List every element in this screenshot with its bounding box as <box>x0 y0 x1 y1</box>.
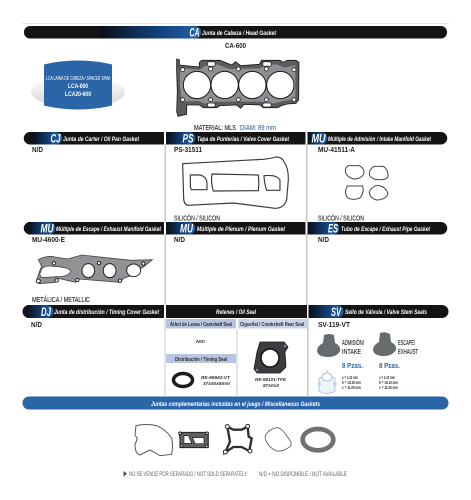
icon: exhaust seal <box>373 332 396 356</box>
header: timing cover gasket: Junta de distribución / Timing Cover Gasket <box>54 310 160 316</box>
header: exhaust manifold gasket <box>24 222 164 236</box>
part status: N/D <box>318 235 329 244</box>
part number: CA-600: CA-600 <box>225 41 246 50</box>
dimensions: exhaust: b = 18.16 mm <box>379 380 398 385</box>
header: exhaust manifold gasket: MU <box>40 222 54 236</box>
header: plenum gasket <box>166 222 306 236</box>
footnotes <box>124 471 347 478</box>
header: intake manifold gasket: Múltiple de Admisión / Intake Manifold Gasket <box>328 137 432 143</box>
part number: MU-41511-A <box>318 145 355 154</box>
timing seal part text <box>201 375 231 386</box>
crankshaft seal part text <box>255 377 287 388</box>
header: valve stem seals: SV <box>331 305 342 319</box>
callout: spacer shim: LCA LAINA DE CABEZA / SPACER SHIM <box>46 76 110 82</box>
label: intake <box>342 338 365 356</box>
subheader: camshaft seal <box>166 319 236 328</box>
panel: valve cover gasket <box>166 132 306 222</box>
spec: material and diameter: DIAM: 89 mm <box>240 123 276 132</box>
header: valve cover gasket: Tapa de Punterías / Valve Cover Gasket <box>197 137 290 143</box>
header: oil seal <box>166 305 307 318</box>
panel: oil pan gasket <box>24 132 164 154</box>
header: intake manifold gasket: MU <box>312 132 326 146</box>
note: not available: N/D = NO DISPONIBLE / NOT AVAILABLE <box>259 472 347 478</box>
subheader: crankshaft seal <box>238 319 307 328</box>
icon: crankshaft seal <box>254 342 288 373</box>
part number: SV-119-VT <box>318 320 350 329</box>
note: not sold separately: NO SE VENDE POR SEPARADO / NOT SOLD SEPARATELY <box>129 472 247 478</box>
subheader: camshaft seal: Árbol de Levas / Camshaft Seal <box>170 321 232 328</box>
dimensions: exhaust <box>379 375 398 390</box>
panel: plenum gasket <box>166 222 306 244</box>
header: valve cover gasket: PS <box>182 132 194 146</box>
label: intake: INTAKE <box>342 347 361 356</box>
callout: spacer shim <box>31 60 125 110</box>
callout: spacer shim: LCA-600 <box>68 83 88 90</box>
dimensions: exhaust: c = 11.05 mm <box>379 385 398 390</box>
icon: intake seal <box>317 334 340 357</box>
header: miscellaneous gaskets: Juntas complementarias incluidas en el juego / Miscellaneous Gaskets <box>151 402 321 408</box>
part number: MU-4600-E <box>32 235 65 244</box>
panel: exhaust manifold gasket <box>24 222 164 304</box>
header: exhaust pipe gasket <box>308 222 447 236</box>
header: exhaust pipe gasket: Tubo de Escape / Exhaust Pipe Gasket <box>341 227 431 233</box>
timing seal part text: RE-99662-VT <box>201 375 231 380</box>
panel: oil seals <box>166 305 307 388</box>
header: head gasket: Junta de Cabeza / Head Gasket <box>202 31 277 37</box>
dimensions: intake <box>342 375 361 390</box>
header: oil pan gasket: CJ <box>50 132 61 146</box>
header: valve stem seals <box>308 305 448 319</box>
crankshaft seal part text: RE-99101-TFE <box>255 377 287 382</box>
panel: valve stem seals <box>308 305 448 394</box>
panel: miscellaneous gaskets <box>22 396 448 456</box>
icon: timing seal ring <box>174 374 192 386</box>
header: miscellaneous gaskets <box>22 396 448 410</box>
quantity: exhaust: 8 Pzas. <box>379 361 400 370</box>
icon: intake manifold gaskets <box>345 166 388 200</box>
header: valve cover gasket <box>166 132 306 146</box>
header: valve stem seals: Sello de Válvula / Valve Stem Seals <box>345 310 428 316</box>
quantity: intake: 8 Pzas. <box>342 361 363 370</box>
crankshaft seal part text: 87x0x0 <box>263 383 279 388</box>
icon: head gasket <box>177 59 299 116</box>
header: timing cover gasket <box>23 305 164 319</box>
icon: valve cover gasket <box>183 157 288 208</box>
label: exhaust <box>398 338 418 356</box>
dimensions: intake: b = 18.16 mm <box>342 380 361 385</box>
icon: arrow marker <box>124 471 127 477</box>
header: head gasket: CA <box>190 26 200 40</box>
timing seal part text: 37x50x8mm <box>203 381 230 386</box>
label: intake: ADMISIÓN/ <box>342 338 365 347</box>
spec: material and diameter <box>194 123 276 132</box>
label: exhaust: ESCAPE/ <box>398 338 415 347</box>
header: exhaust manifold gasket: Múltiple de Escape / Exhaust Manifold Gasket <box>56 227 162 233</box>
material label: METÁLICA / METALLIC <box>32 295 90 304</box>
header: oil seal: Retenes / Oil Seal <box>216 310 256 316</box>
spec: material and diameter: MATERIAL: MLS <box>194 123 236 132</box>
dimensions: intake: a = 4.32 mm <box>342 375 358 380</box>
header: plenum gasket: MU <box>180 222 193 236</box>
part status: N/D <box>31 320 42 329</box>
part status: N/D <box>32 145 43 154</box>
material label: SILICÓN / SILICON <box>174 214 220 222</box>
header: exhaust pipe gasket: ES <box>328 222 338 236</box>
header: oil pan gasket: Junta de Carter / Oil Pan Gasket <box>63 137 140 143</box>
dimensions: intake: c = 11.05 mm <box>342 385 361 390</box>
panel: intake manifold gasket <box>308 132 447 222</box>
panel: timing cover gasket <box>23 305 164 329</box>
dimensions: exhaust: a = 4.32 mm <box>379 375 395 380</box>
panel: exhaust pipe gasket <box>308 222 447 244</box>
camshaft seal status: N/D <box>196 339 206 344</box>
panel: head gasket <box>16 26 447 132</box>
icon: exhaust manifold gasket <box>36 255 152 284</box>
subheader: timing seal: Distribución / Timing Seal <box>175 357 228 363</box>
subheader: crankshaft seal: Cigueñal / Crankshaft Rear Seal <box>240 322 305 328</box>
header: oil pan gasket <box>24 132 164 146</box>
icons: miscellaneous gaskets <box>135 424 333 456</box>
callout: spacer shim: LCA20-600 <box>65 91 91 98</box>
material label: SILICÓN / SILICON <box>318 214 364 222</box>
header: intake manifold gasket <box>308 132 447 146</box>
subheader: timing seal <box>166 354 236 363</box>
header: timing cover gasket: DJ <box>41 305 51 319</box>
header: plenum gasket: Múltiple de Plenum / Plenum Gasket <box>197 227 286 233</box>
part number: PS-31511 <box>174 145 202 154</box>
part status: N/D <box>174 235 185 244</box>
icon: seal diagram <box>318 370 337 394</box>
label: exhaust: EXHAUST <box>398 347 418 356</box>
header: head gasket <box>24 26 447 40</box>
